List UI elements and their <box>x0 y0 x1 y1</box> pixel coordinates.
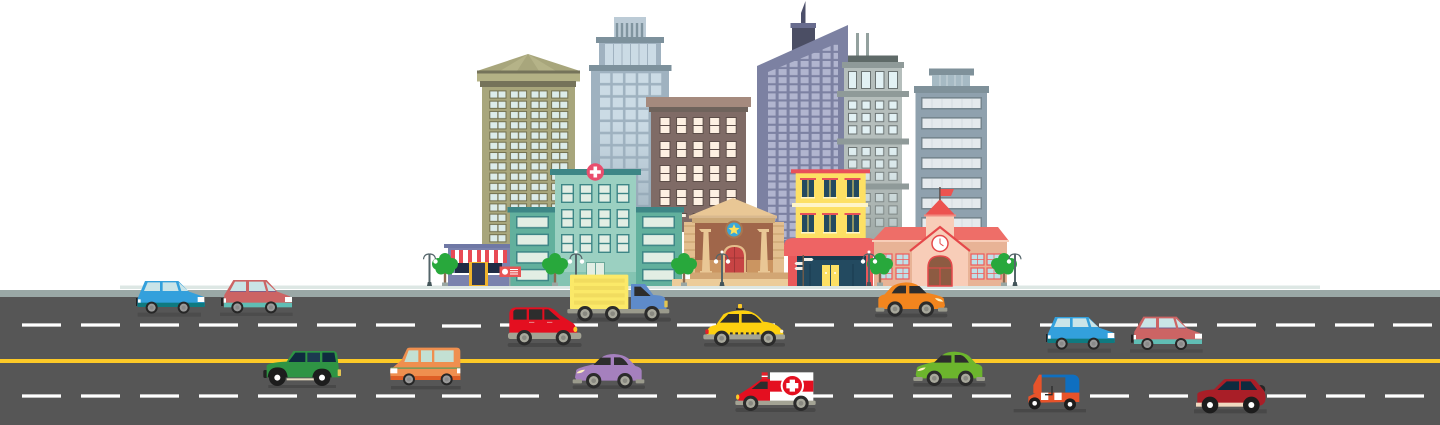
street lamps <box>421 250 1023 286</box>
icon: star badge <box>725 220 743 238</box>
building: yellow house <box>784 169 877 286</box>
skyline buildings <box>421 1 1023 286</box>
building: olive tower <box>477 54 580 257</box>
ambulance <box>735 372 816 412</box>
car: orange sedan <box>875 282 947 317</box>
car: pink wagon right <box>1130 317 1203 353</box>
car: purple sedan <box>573 354 645 389</box>
car: orange van <box>390 348 461 389</box>
icon: clock <box>932 236 948 252</box>
street trees <box>432 253 1017 286</box>
car: green sedan <box>913 352 986 387</box>
auto rickshaw <box>1014 375 1086 412</box>
building: school <box>872 187 1009 286</box>
building: shop with awning <box>444 244 510 286</box>
car: yellow taxi <box>703 304 785 347</box>
truck: yellow delivery <box>567 275 671 322</box>
car: dark red hatchback <box>1194 379 1267 413</box>
building: hospital <box>508 163 684 286</box>
car: blue hatchback right <box>1046 317 1115 353</box>
sign: shop board <box>500 266 521 286</box>
building: bank <box>672 198 797 286</box>
building: purple glass tower <box>757 1 848 245</box>
road and sidewalk <box>0 286 1440 425</box>
building: blue tower <box>589 17 672 216</box>
building: grey tower <box>837 33 909 240</box>
icon: signpost <box>794 255 814 286</box>
car: blue hatchback left <box>136 281 205 317</box>
building: brown block <box>646 97 751 232</box>
building: slate tower <box>914 68 989 243</box>
car: red minivan <box>508 307 582 347</box>
car: pink wagon left <box>220 280 293 316</box>
icon: hospital cross <box>587 163 604 181</box>
car: green SUV <box>263 351 341 388</box>
